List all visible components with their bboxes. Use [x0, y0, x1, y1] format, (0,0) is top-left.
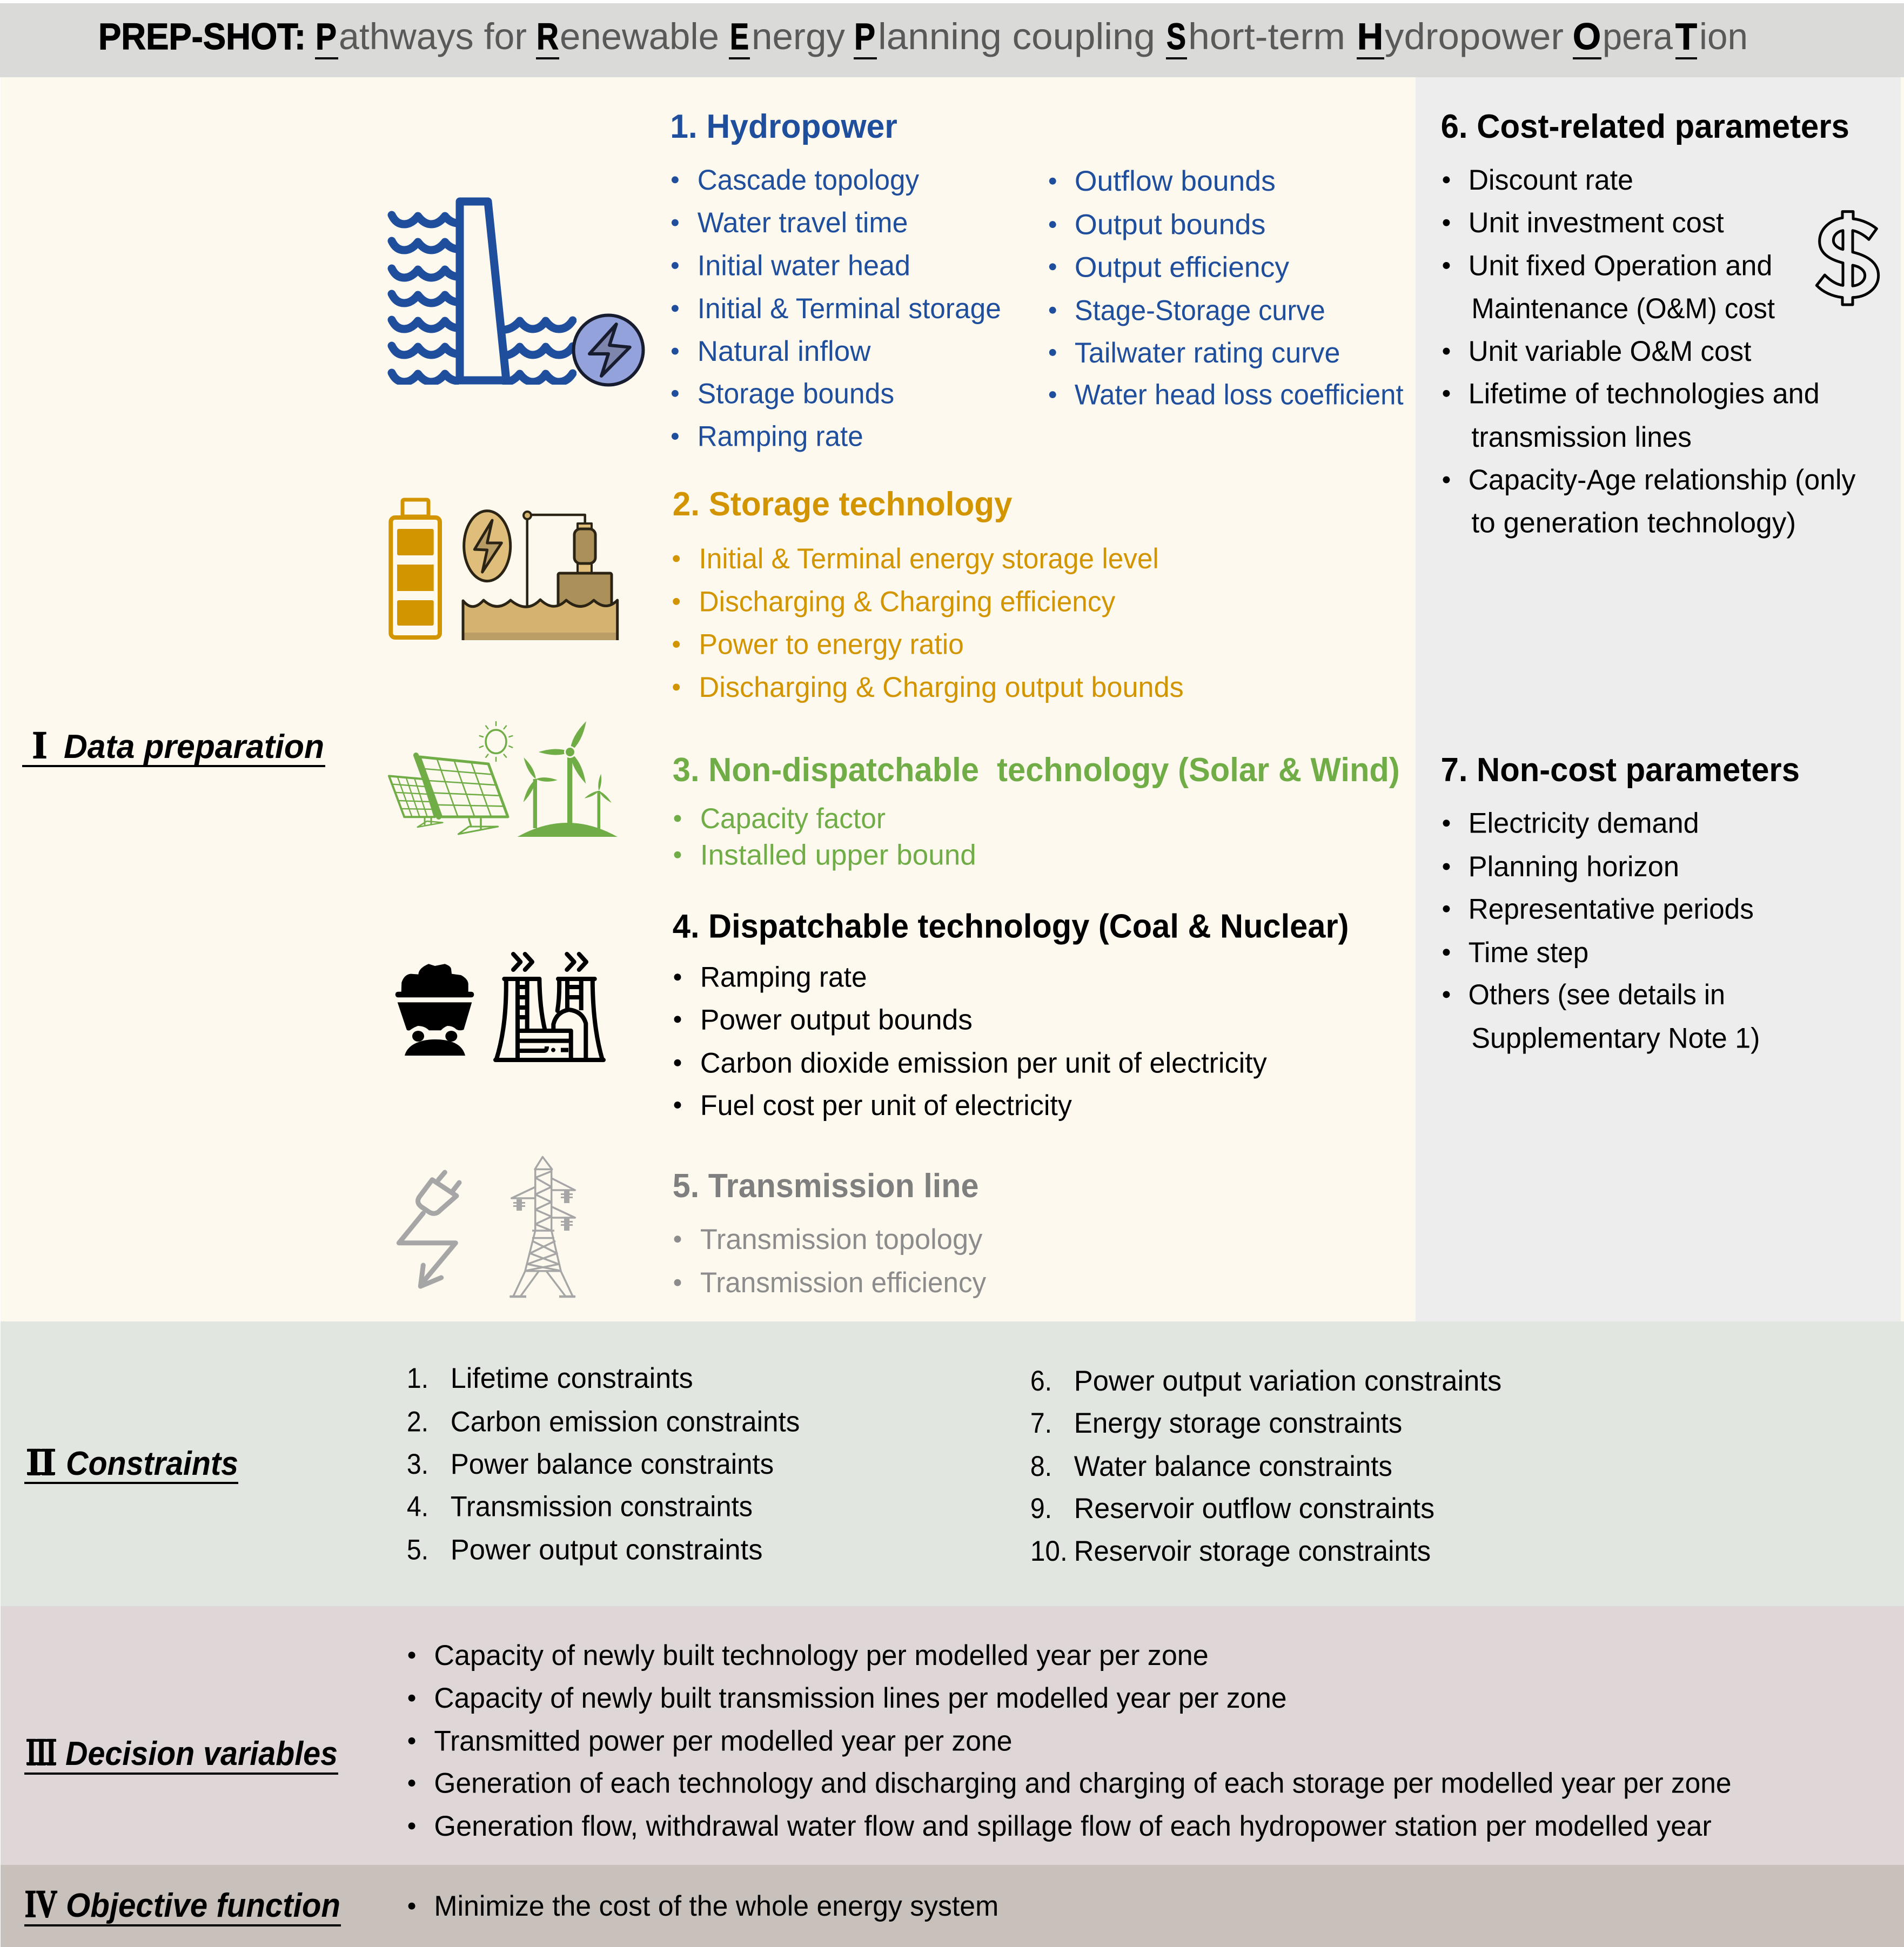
list: hydropower inputs, column 1: Cascade topology — [698, 164, 920, 196]
list: hydropower inputs, column 2: Output efficiency — [1075, 252, 1290, 284]
panel: data preparation background — [1, 77, 1904, 1321]
list: constraints 1 to 5: 5. — [407, 1534, 428, 1566]
list: non-cost parameters: Others (see details in — [1469, 979, 1725, 1011]
list: cost-related parameters: Lifetime of technologies and — [1469, 378, 1820, 409]
icon: hydropower dam — [392, 202, 643, 385]
title: H — [1357, 16, 1383, 57]
section label: IV Objective function: Objective function — [66, 1887, 340, 1924]
list: non-cost parameters: Electricity demand — [1469, 808, 1699, 840]
list: cost-related parameters: Capacity-Age relationship (only — [1469, 464, 1856, 496]
list: cost-related parameters: Unit fixed Operation and — [1469, 250, 1772, 282]
section label: III Decision variables: III — [26, 1730, 56, 1774]
title: O — [1573, 16, 1601, 57]
list: hydropower inputs, column 2: Outflow bounds — [1075, 165, 1276, 197]
list: non-cost parameters: Supplementary Note 1) — [1471, 1022, 1760, 1054]
list: dispatchable inputs: Ramping rate — [700, 962, 867, 993]
list: non-cost parameters: Planning horizon — [1469, 851, 1679, 883]
list: constraints 6 to 10 — [1030, 1365, 1501, 1567]
heading: 1. Hydropower: 1. Hydropower — [670, 108, 897, 145]
list: cost-related parameters: Unit investment cost — [1469, 207, 1724, 239]
list: hydropower inputs, column 1: Initial & Terminal storage — [698, 293, 1001, 325]
panel: decision variables background — [1, 1606, 1904, 1865]
title — [0, 3, 1904, 77]
title: P — [854, 16, 875, 57]
list: constraints 6 to 10: Reservoir outflow constraints — [1074, 1493, 1434, 1525]
panel: parameters background — [1416, 77, 1901, 1321]
icon: coal cart — [395, 964, 474, 1056]
list: hydropower inputs, column 1 — [672, 164, 1001, 453]
list: decision variables: Capacity of newly built transmission lines per modelled year per zone — [434, 1682, 1287, 1714]
list: constraints 1 to 5: 2. — [407, 1406, 428, 1438]
list: dispatchable inputs: Carbon dioxide emission per unit of electricity — [700, 1047, 1267, 1079]
section label: III Decision variables: Decision variables — [65, 1735, 338, 1773]
list: constraints 1 to 5 — [407, 1362, 800, 1566]
list: cost-related parameters — [1443, 164, 1856, 539]
list: constraints 6 to 10: 6. — [1030, 1365, 1052, 1397]
title: hort-term — [1188, 16, 1345, 57]
list: hydropower inputs, column 2: Water head loss coefficient — [1075, 379, 1404, 411]
list: hydropower inputs, column 2: Output bounds — [1075, 209, 1265, 241]
heading: 6. Cost-related parameters: 6. Cost-related parameters — [1441, 108, 1849, 145]
list: non-cost parameters — [1443, 808, 1760, 1054]
list: objective function: Minimize the cost of the whole energy system — [434, 1890, 998, 1922]
title: P — [316, 16, 337, 57]
title: nergy — [752, 16, 845, 57]
list: non-cost parameters: Time step — [1469, 937, 1588, 969]
list: storage inputs: Discharging & Charging efficiency — [699, 586, 1116, 617]
list: constraints 1 to 5: Lifetime constraints — [451, 1362, 693, 1394]
list: hydropower inputs, column 2: Tailwater rating curve — [1075, 337, 1340, 369]
list: dispatchable inputs — [674, 962, 1267, 1122]
section label: I Data preparation: I — [32, 723, 47, 767]
list: constraints 1 to 5: Transmission constraints — [451, 1491, 753, 1523]
list: constraints 6 to 10: Energy storage constraints — [1074, 1407, 1402, 1439]
list: transmission inputs: Transmission efficiency — [700, 1267, 987, 1299]
title: enewable — [560, 16, 719, 57]
section label: I Data preparation: Data preparation — [64, 728, 324, 766]
icon: transmission tower — [509, 1157, 575, 1297]
list: storage inputs: Discharging & Charging output bounds — [699, 672, 1184, 703]
section label: II Constraints — [24, 1440, 238, 1484]
list: hydropower inputs, column 1: Initial water head — [698, 250, 910, 282]
title: ion — [1699, 16, 1748, 57]
title: lanning coupling — [878, 16, 1155, 57]
panel: constraints background — [1, 1321, 1904, 1606]
list: non-dispatchable inputs — [674, 803, 976, 871]
list: decision variables: Generation flow, withdrawal water flow and spillage flow of each hydropower station per modelled year — [434, 1810, 1712, 1842]
list: cost-related parameters: to generation technology) — [1471, 507, 1796, 539]
list: decision variables: Capacity of newly built technology per modelled year per zone — [434, 1640, 1209, 1671]
list: constraints 1 to 5: Power output constraints — [451, 1534, 762, 1566]
list: storage inputs: Power to energy ratio — [699, 629, 964, 661]
title: S — [1166, 16, 1186, 57]
list: hydropower inputs, column 1: Natural inflow — [698, 335, 871, 367]
icon: wind turbines — [518, 721, 618, 837]
list: transmission inputs — [674, 1224, 987, 1299]
section label: II Constraints: II — [27, 1440, 55, 1483]
heading: 2. Storage technology: 2. Storage technology — [673, 485, 1013, 523]
list: decision variables — [408, 1640, 1732, 1842]
heading: 4. Dispatchable technology: 4. Dispatchable technology (Coal & Nuclear) — [673, 908, 1349, 945]
list: constraints 6 to 10: 7. — [1030, 1407, 1052, 1439]
list: constraints 1 to 5: Power balance constraints — [451, 1448, 774, 1480]
list: cost-related parameters: Unit variable O&M cost — [1469, 335, 1752, 367]
list: constraints 1 to 5: 3. — [407, 1448, 428, 1480]
list: constraints 1 to 5: 4. — [407, 1491, 428, 1523]
list: cost-related parameters: Discount rate — [1469, 164, 1633, 196]
list: dispatchable inputs: Power output bounds — [700, 1004, 973, 1036]
section label: III Decision variables — [24, 1730, 338, 1775]
icon: pumped storage — [463, 511, 618, 640]
list: transmission inputs: Transmission topology — [700, 1224, 983, 1256]
list: constraints 1 to 5: 1. — [407, 1362, 428, 1394]
list: cost-related parameters: transmission lines — [1471, 421, 1692, 453]
list: hydropower inputs, column 1: Ramping rate — [698, 421, 863, 453]
list: non-cost parameters: Representative periods — [1469, 893, 1754, 925]
list: constraints 1 to 5: Carbon emission constraints — [451, 1406, 800, 1438]
icon: solar panels — [389, 722, 512, 834]
title: pera — [1603, 16, 1673, 57]
list: constraints 6 to 10: 10. — [1030, 1535, 1068, 1567]
list: hydropower inputs, column 1: Storage bounds — [698, 378, 894, 409]
list: constraints 6 to 10: 9. — [1030, 1493, 1052, 1525]
list: storage inputs — [673, 543, 1184, 703]
list: hydropower inputs, column 1: Water travel time — [698, 207, 908, 239]
icon: dollar sign — [1816, 212, 1879, 305]
title: T — [1675, 16, 1697, 57]
icon: battery — [391, 500, 440, 637]
list: constraints 6 to 10: Power output variation constraints — [1074, 1365, 1501, 1397]
list: non-dispatchable inputs: Capacity factor — [700, 803, 886, 835]
section label: IV Objective function — [24, 1882, 341, 1926]
list: storage inputs: Initial & Terminal energy storage level — [699, 543, 1159, 575]
title: PREP-SHOT: — [98, 16, 306, 57]
icon: plug and bolt — [399, 1172, 459, 1286]
icon: power plant — [495, 954, 604, 1060]
list: cost-related parameters: Maintenance (O&M) cost — [1471, 293, 1775, 325]
title: E — [730, 16, 749, 57]
section label: IV Objective function: IV — [25, 1882, 57, 1925]
list: decision variables: Transmitted power per modelled year per zone — [434, 1726, 1013, 1757]
list: constraints 6 to 10: Water balance constraints — [1074, 1451, 1392, 1482]
panel: objective function background — [1, 1865, 1904, 1947]
list: decision variables: Generation of each technology and discharging and charging of each storage per modelled year per zone — [434, 1768, 1732, 1800]
list: hydropower inputs, column 2: Stage-Storage curve — [1075, 294, 1325, 326]
list: constraints 6 to 10: 8. — [1030, 1451, 1052, 1482]
heading: 5. Transmission line: 5. Transmission line — [673, 1167, 978, 1205]
list: non-dispatchable inputs: Installed upper bound — [700, 839, 976, 871]
title: athways for — [339, 16, 527, 57]
title: R — [537, 16, 559, 57]
title: ydropower — [1385, 16, 1564, 57]
section label: II Constraints: Constraints — [66, 1445, 238, 1482]
heading: 3. Non-dispatchable technology: 3. Non-dispatchable technology (Solar & Wind) — [673, 751, 1400, 789]
list: hydropower inputs, column 2 — [1049, 165, 1404, 411]
list: dispatchable inputs: Fuel cost per unit of electricity — [700, 1090, 1072, 1122]
heading: 7. Non-cost parameters: 7. Non-cost parameters — [1441, 751, 1800, 789]
list: constraints 6 to 10: Reservoir storage constraints — [1074, 1535, 1431, 1567]
